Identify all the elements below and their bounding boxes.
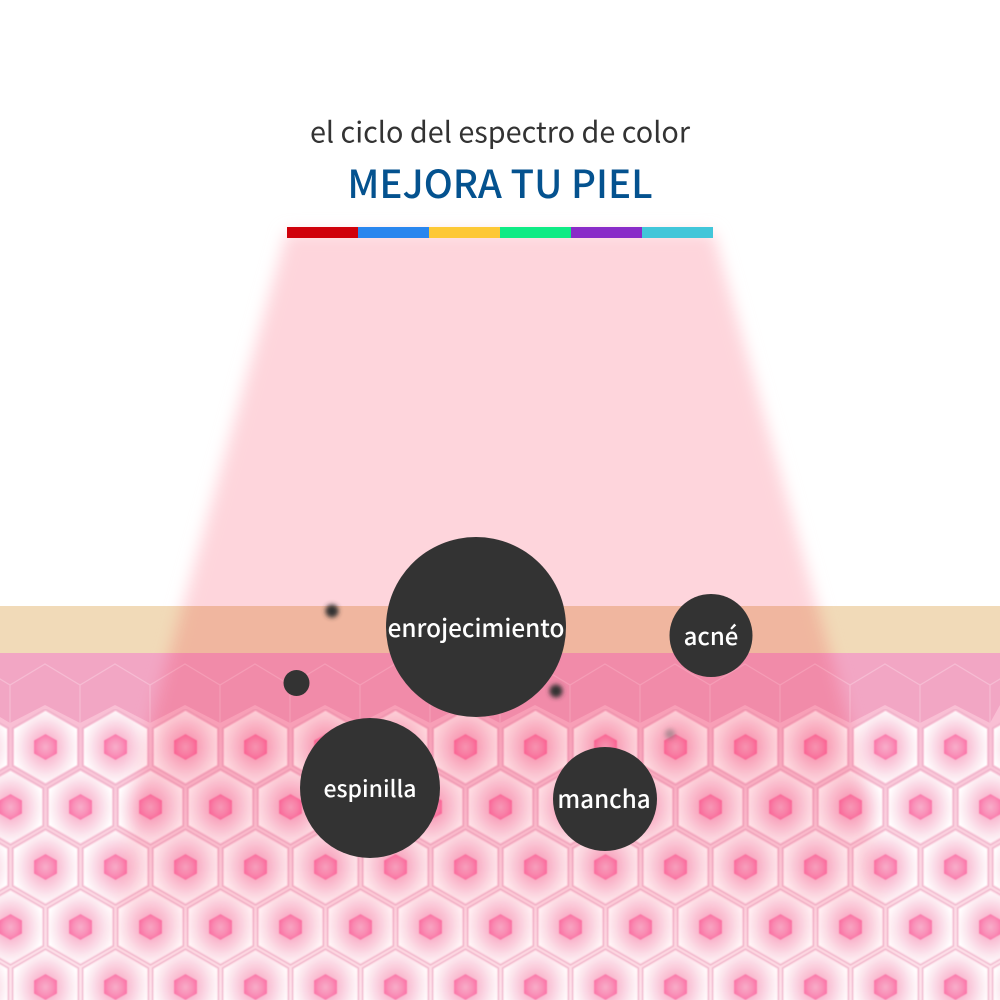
- blemish: mancha: [553, 747, 657, 851]
- blemish: enrojecimiento: enrojecimiento: [388, 609, 564, 644]
- hexagonal skin cells: [0, 709, 1000, 1000]
- blemish: acné: [670, 594, 752, 677]
- skin layer: upper pink band: [0, 653, 1000, 723]
- color spectrum bar: [287, 227, 713, 238]
- blemish dots: [284, 604, 675, 739]
- light beam: [95, 232, 905, 1000]
- skin layer: epidermis band: [0, 606, 1000, 653]
- panel: skin cross-section: [0, 606, 1000, 1000]
- subtitle: el ciclo del espectro de color: [310, 110, 691, 152]
- blemish: enrojecimiento: [386, 537, 566, 717]
- blemish: espinilla: [300, 718, 440, 858]
- blemish: mancha: mancha: [557, 780, 651, 815]
- title: MEJORA TU PIEL: [347, 154, 653, 210]
- skin layer: cell field background: [0, 700, 1000, 1000]
- upper band hexagon outlines: [0, 664, 1000, 723]
- blemish: espinilla: espinilla: [323, 770, 417, 804]
- blemish: acné: acné: [684, 617, 738, 652]
